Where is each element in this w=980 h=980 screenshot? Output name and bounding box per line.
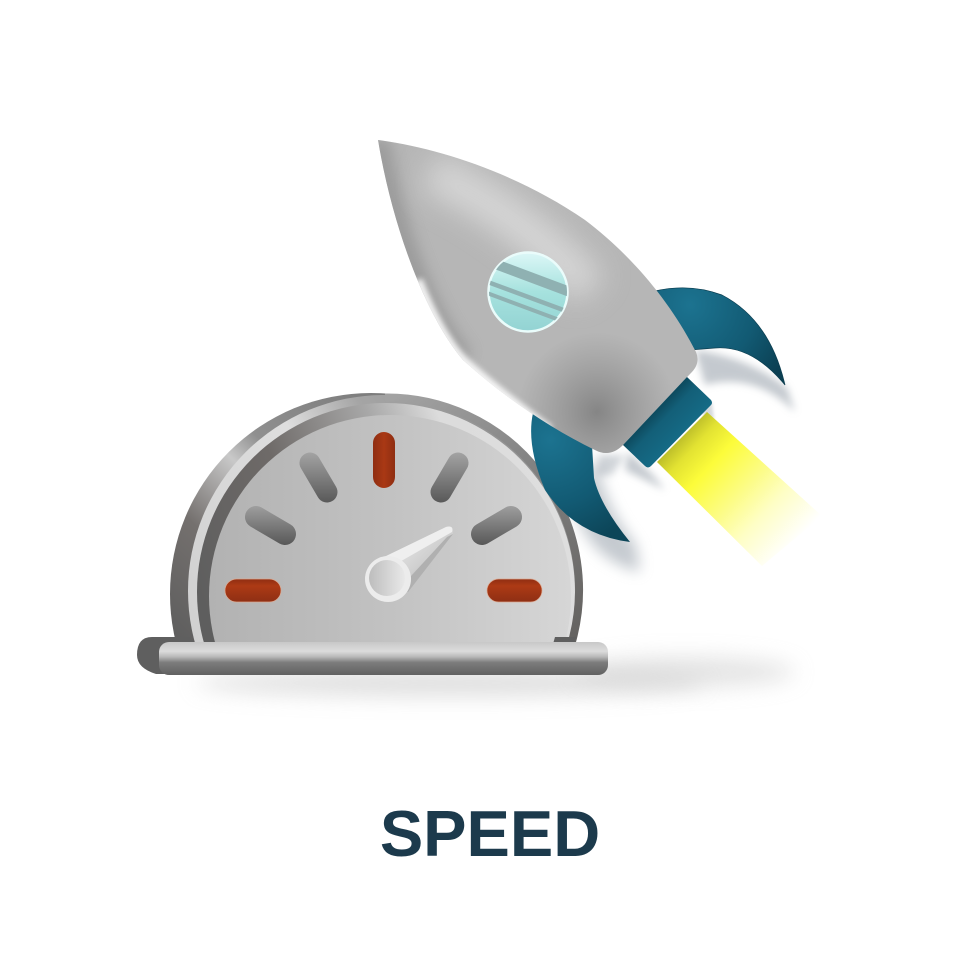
speedometer gauge <box>137 393 608 675</box>
gauge base bar <box>159 642 608 675</box>
ground shadow <box>195 657 795 696</box>
tick: lower left grey <box>256 517 285 534</box>
flame <box>657 412 822 566</box>
rocket <box>360 130 822 572</box>
gauge back foot <box>137 637 190 674</box>
tick: left red <box>225 579 281 602</box>
left fin <box>531 413 630 542</box>
gauge dial layers <box>170 393 584 642</box>
rocket body <box>378 140 698 453</box>
tick: lower right grey <box>482 517 511 534</box>
rocket shadows <box>575 350 795 572</box>
rocket nozzle <box>623 377 712 468</box>
title: SPEED <box>380 797 600 870</box>
tick: top red <box>373 432 395 488</box>
right fin <box>655 288 785 385</box>
tick: right red <box>487 579 542 602</box>
rocket window <box>485 252 570 332</box>
needle <box>365 527 453 602</box>
tick: upper right grey <box>441 463 458 492</box>
tick: upper left grey <box>310 463 327 492</box>
